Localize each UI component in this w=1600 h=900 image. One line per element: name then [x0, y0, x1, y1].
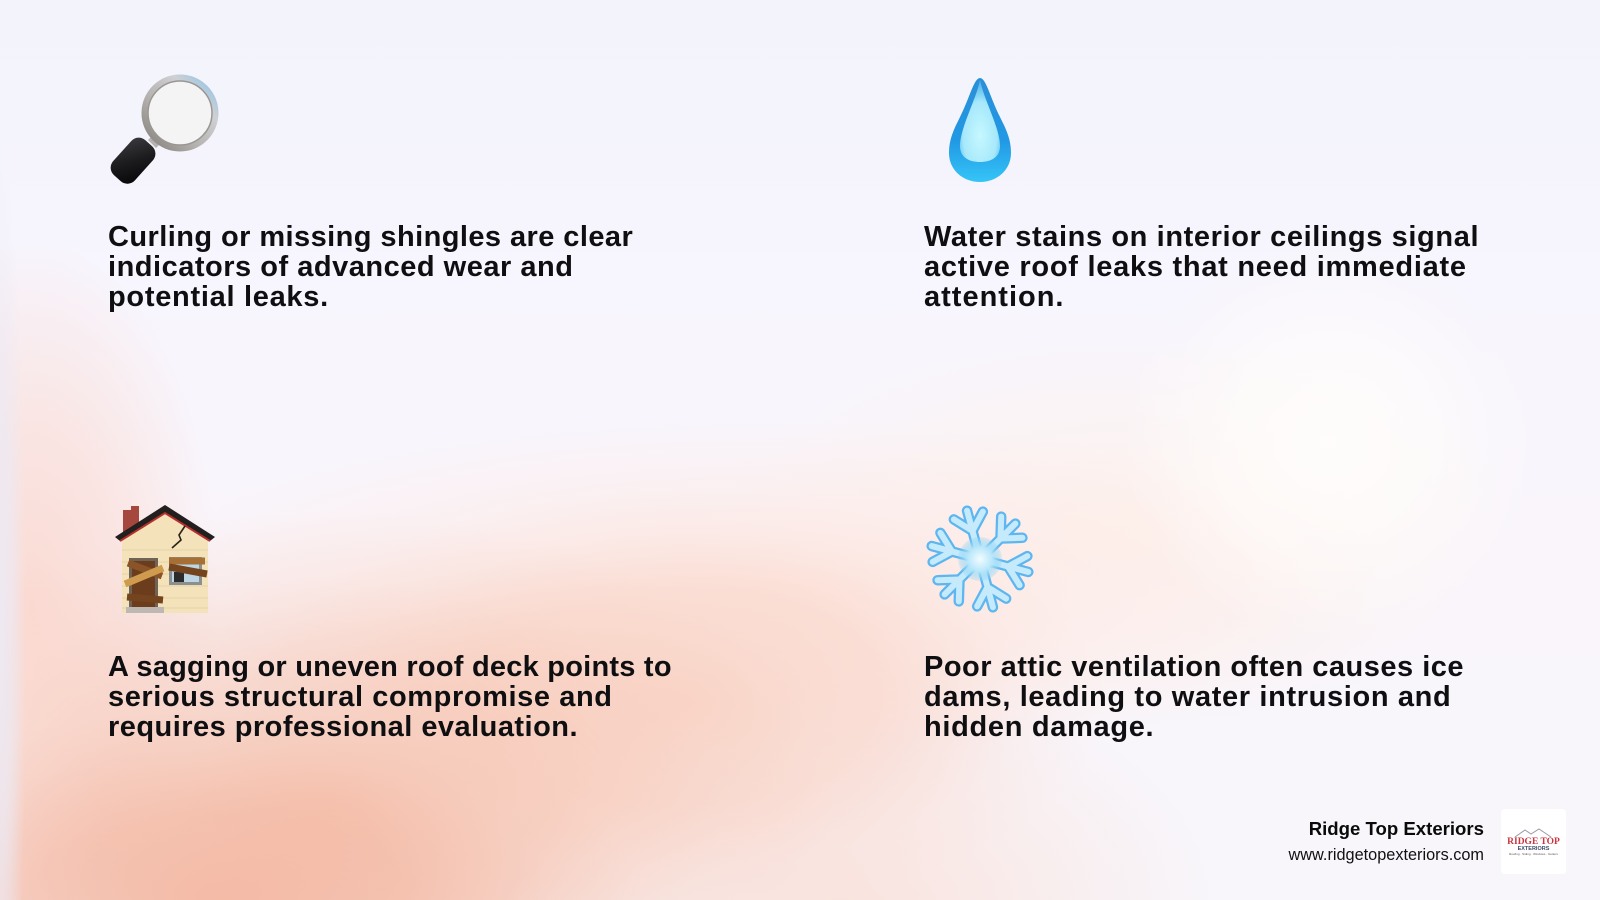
icon: water drop [949, 78, 1011, 182]
text: sagging roof: requires professional evaluation. [108, 711, 578, 743]
text: water stains: active roof leaks that need immediate [924, 251, 1467, 283]
boards [125, 561, 207, 600]
text: sagging roof: serious structural compromise and [108, 681, 613, 713]
brand name: Ridge Top Exteriors [1309, 818, 1484, 839]
text: curling shingles: Curling or missing shingles are clear [108, 221, 633, 253]
text: attic ventilation [924, 651, 1464, 743]
logo card [1501, 809, 1566, 874]
text: attic ventilation: dams, leading to water intrusion and [924, 681, 1451, 713]
logo mark: Roofing · Siding · Windows · Gutters [1509, 852, 1558, 856]
crack [172, 526, 185, 548]
text: attic ventilation: Poor attic ventilation often causes ice [924, 651, 1464, 683]
text: water stains [924, 221, 1479, 313]
logo mark: RIDGE TOP [1507, 837, 1560, 847]
icon: derelict house [115, 505, 215, 613]
icon: magnifying glass [110, 74, 218, 184]
icon: snowflake [926, 506, 1034, 612]
text: attic ventilation: hidden damage. [924, 711, 1154, 743]
brand url: www.ridgetopexteriors.com [1289, 846, 1484, 864]
steps [126, 607, 164, 613]
text: curling shingles [108, 221, 633, 313]
logo mark: EXTERIORS [1518, 846, 1550, 852]
text: sagging roof [108, 651, 672, 743]
window [169, 557, 202, 585]
text: water stains: Water stains on interior ceilings signal [924, 221, 1479, 253]
text: curling shingles: indicators of advanced wear and [108, 251, 573, 283]
logo mark [1507, 828, 1560, 856]
chimney [123, 506, 139, 534]
house wall [122, 510, 208, 613]
text: water stains: attention. [924, 281, 1064, 313]
door [129, 558, 158, 607]
text: curling shingles: potential leaks. [108, 281, 329, 313]
roof [115, 505, 215, 541]
text: sagging roof: A sagging or uneven roof deck points to [108, 651, 672, 683]
